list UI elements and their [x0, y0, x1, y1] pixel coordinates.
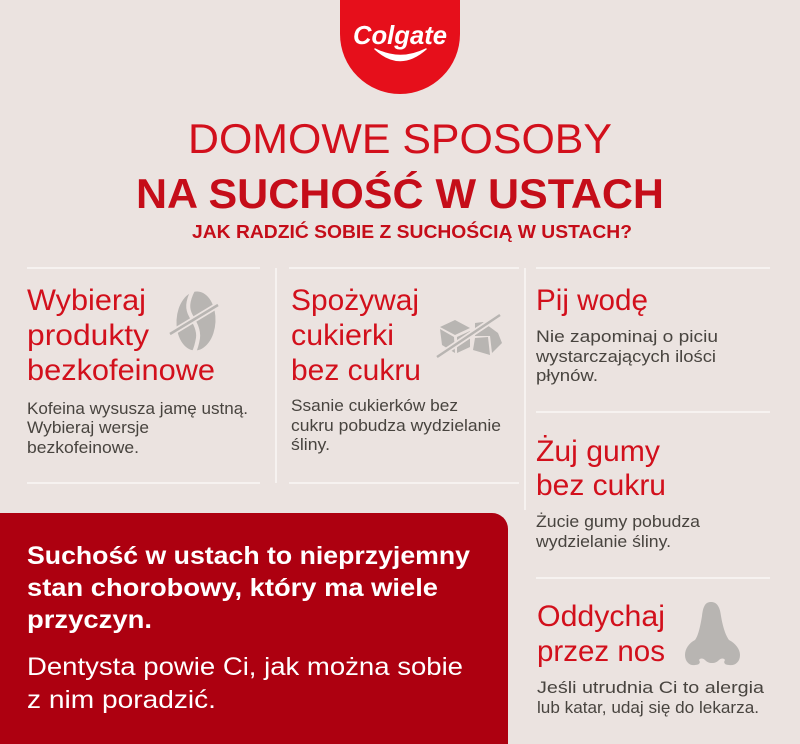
- heading: gum: bez cukru: [536, 469, 666, 502]
- text: candy: śliny.: [291, 436, 330, 454]
- title: NA SUCHOŚĆ W USTACH: [136, 169, 664, 217]
- title: [136, 115, 664, 217]
- callout heading: przyczyn.: [27, 606, 152, 634]
- subtitle: JAK RADZIĆ SOBIE Z SUCHOŚCIĄ W USTACH?: [192, 221, 632, 242]
- text: caffeine-free: [27, 400, 248, 457]
- heading: candy: cukierki: [291, 319, 394, 352]
- callout: dentist panel: [0, 513, 508, 744]
- heading: candy: [291, 284, 421, 387]
- callout heading: stan chorobowy, który ma wiele: [27, 574, 438, 602]
- heading: candy: bez cukru: [291, 354, 421, 387]
- text: gum: Żucie gumy pobudza: [536, 512, 701, 531]
- callout text: z nim poradzić.: [27, 686, 216, 714]
- callout heading: [27, 542, 470, 634]
- text: candy: cukru pobudza wydzielanie: [291, 417, 501, 435]
- text: nose: lub katar, udaj się do lekarza.: [537, 699, 759, 717]
- panel: sugar-free candy: [291, 284, 502, 454]
- callout heading: Suchość w ustach to nieprzyjemny: [27, 542, 470, 570]
- heading: caffeine-free: Wybieraj: [27, 284, 146, 317]
- text: caffeine-free: Wybieraj wersje: [27, 419, 149, 437]
- heading: caffeine-free: [27, 284, 215, 387]
- callout text: [27, 653, 463, 714]
- icon: nose: [685, 602, 740, 665]
- panel: caffeine-free products: [27, 284, 248, 457]
- logo: Colgate badge: [340, 0, 460, 94]
- text: water: wystarczających ilości: [535, 348, 716, 366]
- heading: gum: [536, 435, 666, 502]
- text: water: płynów.: [536, 367, 598, 385]
- text: gum: wydzielanie śliny.: [535, 533, 671, 551]
- logo: Colgate badge: Colgate: [353, 20, 447, 50]
- panel: chew gum: [535, 435, 701, 551]
- heading: water: Pij wodę: [536, 284, 648, 317]
- heading: caffeine-free: produkty: [27, 319, 149, 352]
- text: gum: [535, 512, 701, 551]
- heading: candy: Spożywaj: [291, 284, 419, 317]
- icon: crossed coffee bean: [170, 290, 218, 352]
- text: candy: [291, 397, 501, 454]
- heading: caffeine-free: bezkofeinowe: [27, 354, 215, 387]
- callout text: Dentysta powie Ci, jak można sobie: [27, 653, 463, 681]
- heading: nose: [537, 600, 665, 668]
- text: water: Nie zapominaj o piciu: [536, 328, 718, 346]
- panel: drink water: [535, 284, 718, 385]
- heading: nose: przez nos: [537, 635, 665, 668]
- text: water: [535, 328, 718, 385]
- panel: breathe through nose: [537, 600, 765, 717]
- text: caffeine-free: Kofeina wysusza jamę ustną.: [27, 400, 248, 418]
- title: DOMOWE SPOSOBY: [188, 115, 612, 162]
- heading: nose: Oddychaj: [537, 600, 665, 633]
- text: nose: Jeśli utrudnia Ci to alergia: [537, 679, 765, 697]
- heading: gum: Żuj gumy: [536, 435, 660, 468]
- text: caffeine-free: bezkofeinowe.: [27, 439, 139, 457]
- icon: crossed sugar cubes: [437, 315, 502, 357]
- text: nose: [537, 679, 765, 717]
- text: candy: Ssanie cukierków bez: [291, 397, 458, 415]
